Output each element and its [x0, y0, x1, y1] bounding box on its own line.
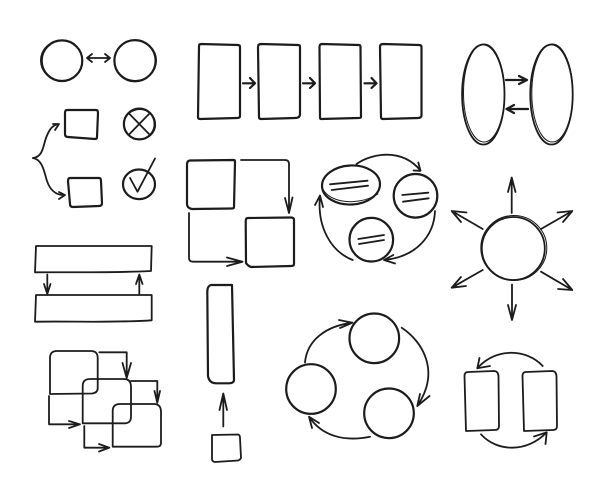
tall bar with arrow and small box: [207, 285, 241, 462]
central circle with six radiating arrows: [452, 178, 572, 320]
row of four boxes with arrows: [198, 44, 422, 119]
icon: check mark in circle: [123, 158, 155, 199]
two wide bars with arrows: [35, 246, 152, 322]
icon: cross in circle: [124, 109, 156, 140]
two circles with double arrow: [40, 40, 156, 81]
three overlapping squares with connectors: [49, 351, 161, 452]
square-to-square flow with connectors: [187, 160, 294, 267]
two boxes with circular arrows: [464, 353, 557, 448]
branching bracket with two boxes: [33, 110, 102, 207]
two tall ovals with exchange arrows: [462, 44, 573, 144]
cycle of three circles: [286, 314, 430, 439]
cycle of three labelled ovals: [315, 155, 437, 264]
